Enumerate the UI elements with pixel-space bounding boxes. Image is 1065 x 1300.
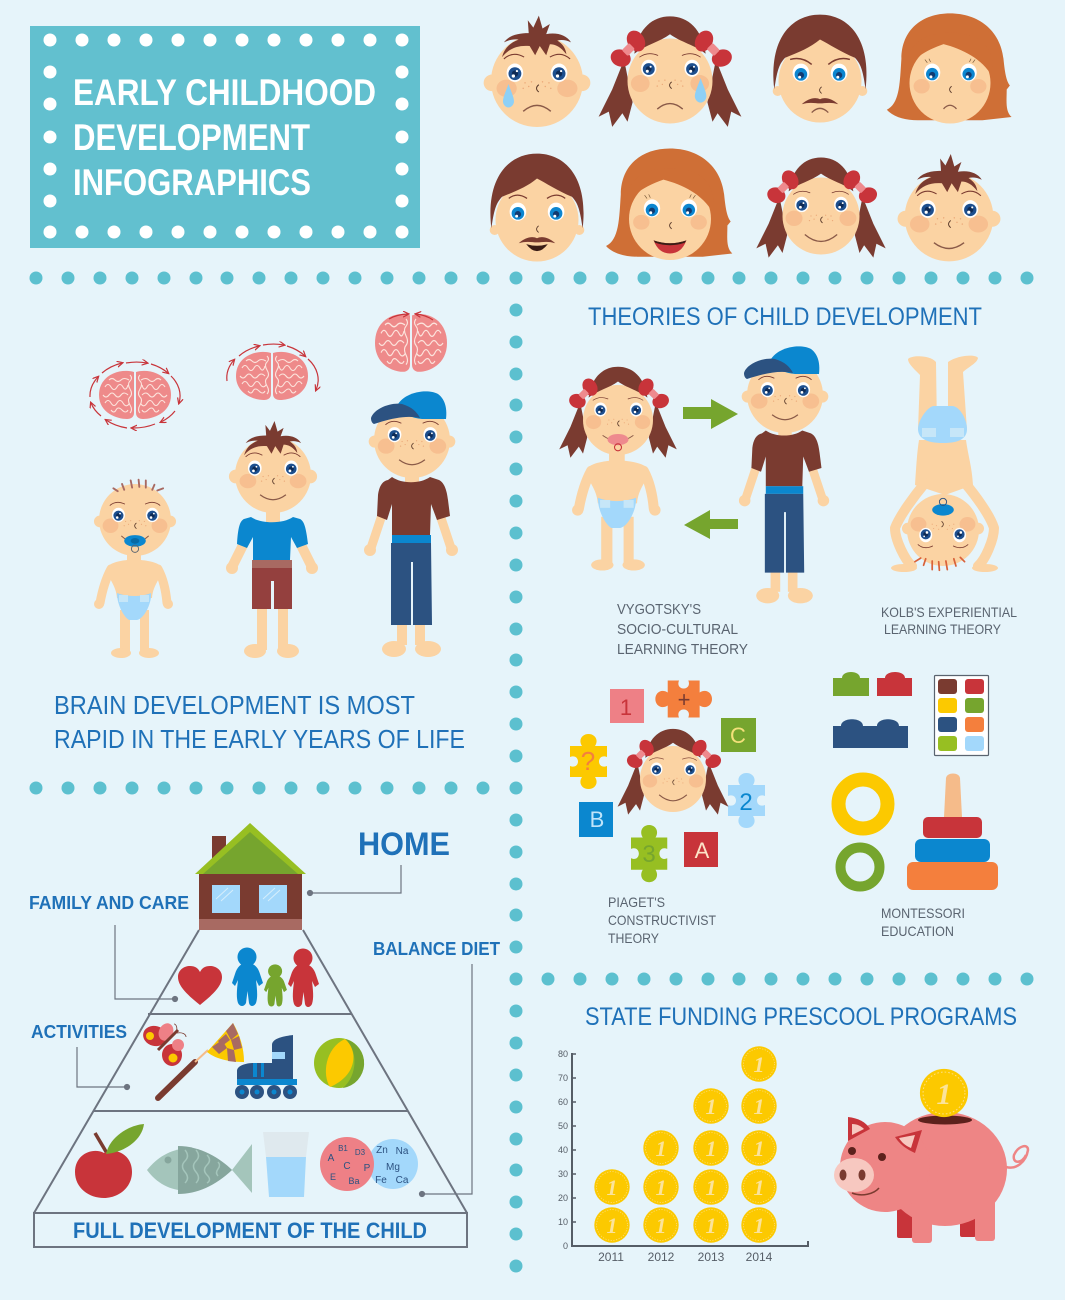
axis numbers: 70: [558, 1073, 568, 1083]
icon: fish: [147, 1144, 252, 1194]
face: happy woman: [606, 148, 732, 260]
icon: apple: [75, 1124, 144, 1198]
arrow: left: [684, 510, 738, 539]
handstand baby figure: [891, 356, 998, 572]
label: Kolb: [881, 604, 1017, 637]
Piaget blocks and puzzle pieces: B: [590, 807, 604, 832]
face: happy man: [490, 154, 584, 262]
label: balance diet: BALANCE DIET: [373, 939, 500, 959]
icon: vitamins: Fe: [375, 1175, 387, 1186]
label: Montessori: [881, 905, 965, 939]
axis numbers: 0: [563, 1241, 568, 1251]
baby figure: [94, 480, 176, 658]
dotted dividers: [30, 272, 1034, 1272]
label: Piaget: THEORY: [608, 930, 660, 946]
year labels: 2014: [746, 1250, 773, 1264]
Piaget blocks and puzzle pieces: +: [678, 687, 690, 712]
axis numbers: 30: [558, 1169, 568, 1179]
label: Piaget: CONSTRUCTIVIST: [608, 912, 716, 928]
coin columns: 1: [754, 1136, 764, 1161]
face: sad woman: [887, 13, 1012, 124]
icon: vitamins: Ba: [348, 1176, 360, 1186]
label: family and care: FAMILY AND CARE: [29, 893, 189, 913]
heading: theories: THEORIES OF CHILD DEVELOPMENT: [588, 303, 982, 331]
face: angry man: [773, 15, 867, 122]
icon: heart: [178, 966, 222, 1005]
leader: activities: [77, 1047, 130, 1090]
title panel: [30, 26, 420, 248]
label: activities: ACTIVITIES: [31, 1022, 127, 1042]
pyramid frame: [34, 930, 467, 1247]
panel: state funding: [558, 1003, 1028, 1264]
face: crying girl: [599, 16, 741, 127]
green ring: [840, 848, 880, 886]
label: Montessori: EDUCATION: [881, 923, 954, 939]
coin columns: 1: [754, 1213, 764, 1238]
year labels: 2013: [698, 1250, 725, 1264]
icon: butterfly net: [158, 1023, 244, 1098]
coin chart: [558, 1046, 808, 1264]
title text: EARLY CHILDHOOD: [73, 72, 376, 113]
brain development caption: [54, 690, 465, 754]
coin columns: 1: [706, 1094, 716, 1119]
Piaget blocks and puzzle pieces: 3: [642, 841, 656, 868]
icon: butterfly: [141, 1021, 186, 1066]
axis numbers: 40: [558, 1145, 568, 1155]
icon: vitamins: B1: [338, 1144, 348, 1153]
coin columns: 1: [606, 1175, 618, 1200]
piggy bank: 1: [937, 1078, 951, 1111]
brain development caption: BRAIN DEVELOPMENT IS MOST: [54, 690, 415, 720]
axis numbers: 50: [558, 1121, 568, 1131]
coin columns: 1: [656, 1175, 666, 1200]
stacking pyramid toy: [907, 774, 998, 890]
icon: vitamins: P: [364, 1163, 371, 1174]
label: Montessori: MONTESSORI: [881, 905, 965, 921]
icon: vitamins: C: [343, 1161, 351, 1172]
label: Piaget: PIAGET'S: [608, 894, 665, 910]
label: Kolb: LEARNING THEORY: [884, 621, 1002, 637]
brain with medium growth ring: [227, 344, 318, 400]
icon: vitamins: A: [328, 1153, 335, 1164]
coin columns: 1: [754, 1175, 764, 1200]
house: [195, 823, 306, 930]
arrow: right: [683, 399, 738, 429]
axis numbers: 20: [558, 1193, 568, 1203]
Montessori colour palette: [934, 676, 988, 756]
coin columns: 1: [706, 1136, 716, 1161]
year labels: 2012: [648, 1250, 675, 1264]
title text: INFOGRAPHICS: [73, 162, 311, 203]
icon: roller skate: [235, 1035, 297, 1099]
label: Piaget: [608, 894, 716, 946]
leader: family: [115, 925, 178, 1002]
label: Vygotsky: SOCIO-CULTURAL: [617, 621, 738, 638]
coin columns: [594, 1046, 777, 1243]
icon: vitamins: Zn: [376, 1145, 388, 1156]
year labels: [598, 1250, 773, 1264]
icon: vitamins: E: [330, 1172, 336, 1182]
chart axes: [572, 1053, 808, 1246]
axis numbers: 10: [558, 1217, 568, 1227]
coin columns: 1: [706, 1175, 716, 1200]
icon: ball: [314, 1038, 364, 1088]
Piaget blocks and puzzle pieces: [570, 680, 765, 882]
smiling girl head: [618, 729, 728, 815]
year labels: 2011: [598, 1250, 624, 1264]
axis numbers: 80: [558, 1049, 568, 1059]
panel: brain development: [54, 314, 465, 754]
teen figure: [364, 391, 458, 657]
leader: home: [308, 865, 401, 896]
boy figure: [226, 421, 318, 658]
yellow ring: [838, 780, 888, 828]
axis numbers: [558, 1049, 568, 1251]
axis numbers: 60: [558, 1097, 568, 1107]
Montessori building bricks: [833, 672, 912, 748]
icon: family figures: [232, 948, 319, 1007]
teen figure: [739, 346, 829, 603]
face: crying boy: [484, 16, 590, 127]
icon: vitamins: D3: [355, 1148, 366, 1157]
baby girl figure: [559, 367, 677, 571]
Piaget blocks and puzzle pieces: 2: [739, 789, 753, 816]
Piaget blocks and puzzle pieces: C: [730, 723, 746, 748]
Piaget blocks and puzzle pieces: A: [695, 838, 710, 863]
brain development caption: RAPID IN THE EARLY YEARS OF LIFE: [54, 724, 465, 754]
icon: vitamins: [320, 1137, 418, 1191]
title text: DEVELOPMENT: [73, 117, 310, 158]
title text: [73, 72, 376, 203]
icon: vitamins: Na: [396, 1146, 409, 1157]
panel: home pyramid: [29, 823, 500, 1247]
brain nearly full size: [375, 314, 447, 372]
coin columns: 1: [754, 1052, 764, 1077]
coin columns: 1: [656, 1213, 666, 1238]
Piaget blocks and puzzle pieces: ?: [581, 746, 595, 776]
coin columns: 1: [706, 1213, 716, 1238]
face: smiling boy: [898, 154, 1000, 261]
piggy bank: [834, 1069, 1028, 1243]
label: Vygotsky: LEARNING THEORY: [617, 641, 748, 658]
label: Vygotsky: [617, 601, 748, 658]
icon: vitamins: Ca: [396, 1175, 409, 1186]
label: full development: FULL DEVELOPMENT OF THE CHILD: [73, 1218, 427, 1243]
leader: diet: [420, 964, 472, 1196]
icon: glass of water: [263, 1132, 309, 1197]
face: smiling girl: [756, 157, 886, 258]
icon: vitamins: Mg: [386, 1162, 400, 1173]
face row: emotions: [484, 13, 1012, 262]
coin columns: 1: [656, 1136, 666, 1161]
coin columns: 1: [754, 1094, 764, 1119]
Piaget blocks and puzzle pieces: 1: [620, 695, 632, 720]
panel: theories of child development: [559, 303, 1017, 946]
label: Vygotsky: VYGOTSKY'S: [617, 601, 701, 618]
label: Kolb: KOLB'S EXPERIENTIAL: [881, 604, 1017, 620]
label: home: HOME: [358, 826, 450, 862]
brain with large growth ring: [90, 362, 180, 428]
coin columns: 1: [606, 1213, 618, 1238]
